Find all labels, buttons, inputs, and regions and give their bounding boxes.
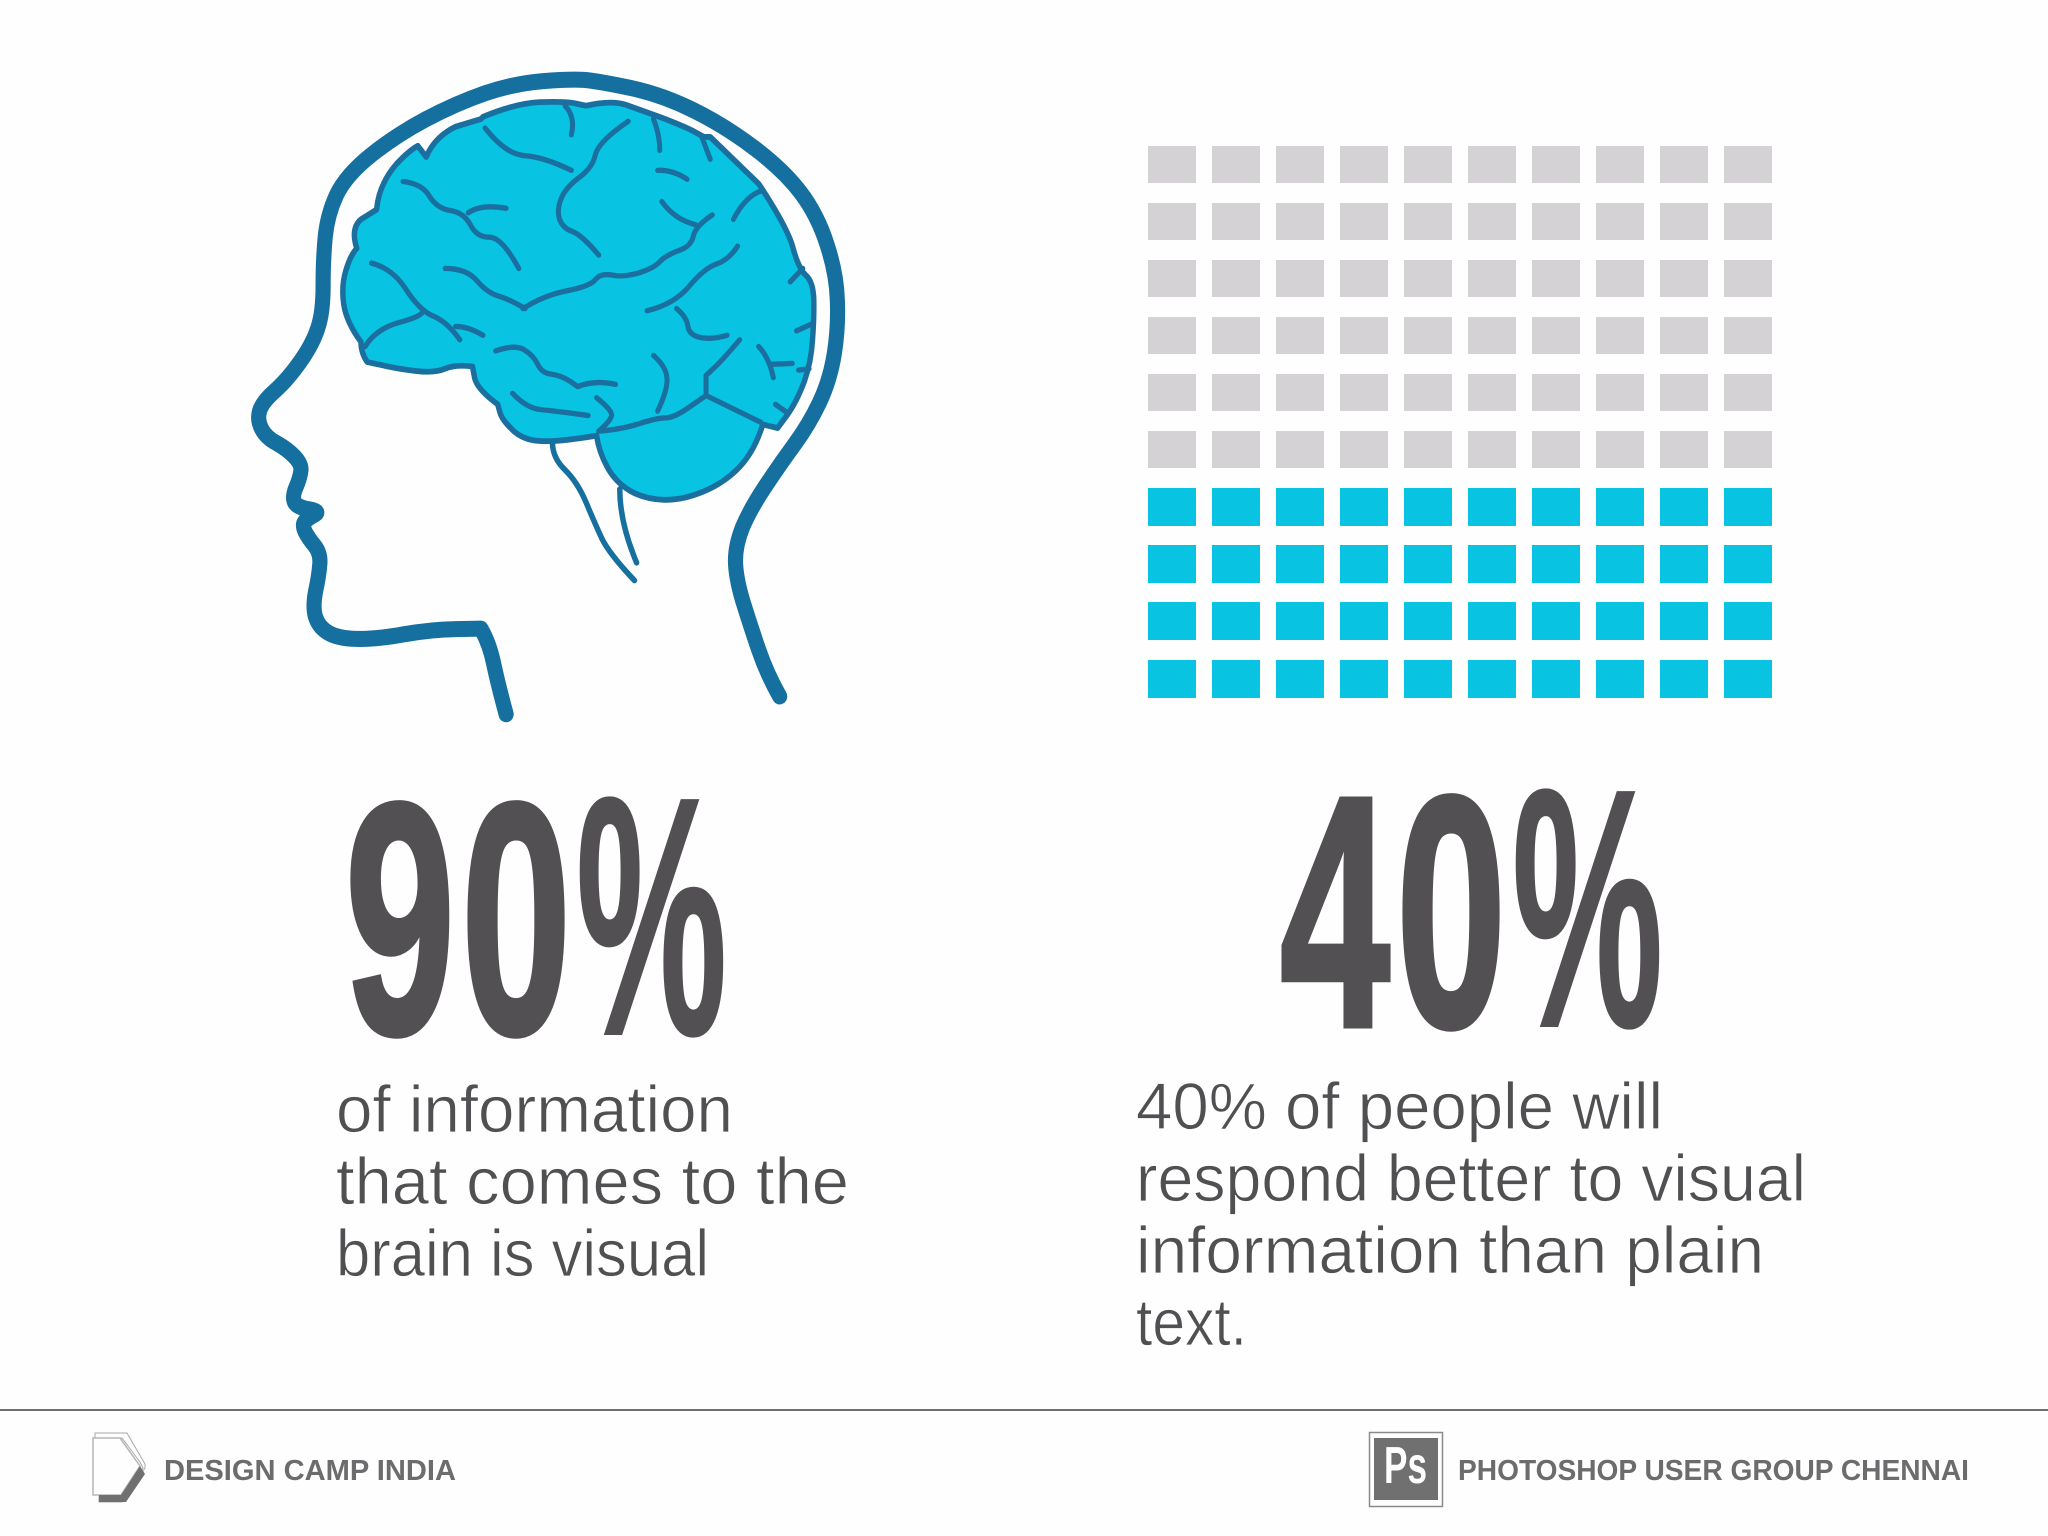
text: 40% description: information than plain bbox=[1136, 1213, 1764, 1287]
stat: 40%: 40 bbox=[1280, 728, 1512, 1096]
text: 40% description: text. bbox=[1136, 1285, 1247, 1359]
text: 40% description: respond better to visual bbox=[1136, 1141, 1806, 1215]
icon: Design Camp logo mark bbox=[93, 1433, 145, 1502]
footer: Design Camp India logo bbox=[93, 1433, 456, 1502]
stat: 90%: 90 bbox=[345, 735, 577, 1103]
text: 90% description: of information bbox=[336, 1072, 733, 1146]
label: PHOTOSHOP USER GROUP CHENNAI bbox=[1458, 1455, 1969, 1487]
text: 90% description bbox=[336, 1072, 849, 1290]
text: 40% description bbox=[1136, 1069, 1806, 1359]
text: 90% description: that comes to the bbox=[336, 1144, 849, 1218]
text: 90% description: brain is visual bbox=[336, 1216, 709, 1290]
icon: Ps logo: Ps bbox=[1384, 1437, 1427, 1495]
stat: 40% bbox=[1280, 719, 1663, 1098]
waffle chart: 40 of 100 squares highlighted bbox=[1148, 146, 1772, 698]
brain bbox=[343, 102, 814, 500]
label: DESIGN CAMP INDIA bbox=[164, 1455, 456, 1487]
stat: 90% bbox=[345, 727, 727, 1106]
stat: 40%: % bbox=[1512, 719, 1663, 1098]
stat: 90%: % bbox=[576, 727, 727, 1106]
brain folds bbox=[365, 106, 811, 431]
cyan squares bbox=[1148, 488, 1772, 698]
icon: head with brain bbox=[259, 80, 838, 714]
text: 40% description: 40% of people will bbox=[1136, 1069, 1663, 1143]
head outline bbox=[259, 80, 838, 714]
brain stem nerves bbox=[552, 442, 637, 581]
icon: Ps logo bbox=[1370, 1432, 1442, 1506]
grey squares bbox=[1148, 146, 1772, 468]
footer: Photoshop User Group Chennai logo bbox=[1370, 1432, 1969, 1506]
